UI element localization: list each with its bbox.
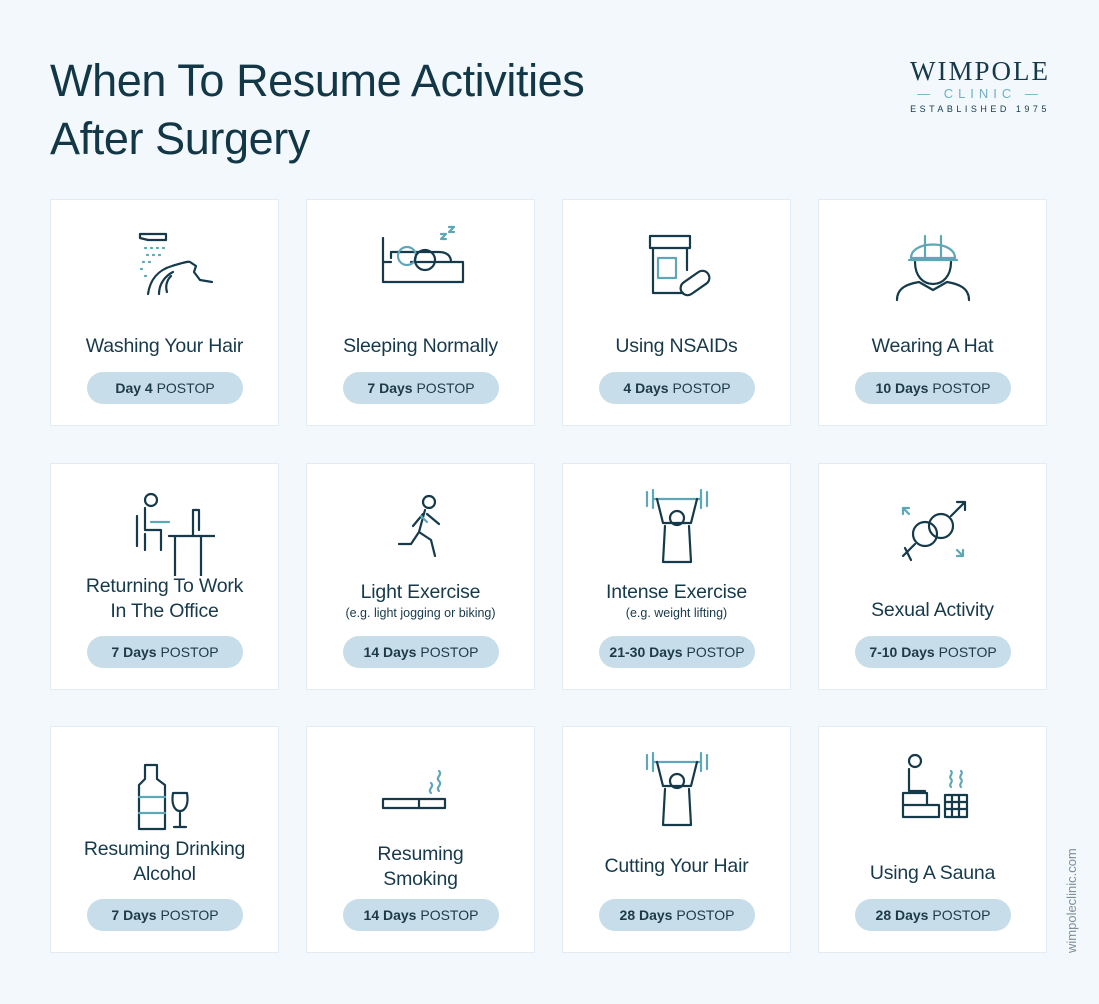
card: alcohol: Alcohol bbox=[133, 863, 196, 885]
card: alcohol bbox=[50, 726, 279, 953]
logo: — CLINIC — bbox=[917, 86, 1043, 101]
icon: gender symbols bbox=[902, 500, 966, 562]
card: light exercise bbox=[306, 463, 535, 690]
icon: sauna bbox=[902, 754, 968, 818]
logo: WIMPOLE bbox=[910, 56, 1050, 86]
card: sleeping: Sleeping Normally bbox=[343, 335, 498, 357]
card: smoking: Smoking bbox=[383, 868, 458, 890]
pill: 10 Days POSTOP bbox=[876, 380, 990, 396]
pill bbox=[599, 899, 755, 931]
card: light exercise: (e.g. light jogging or biking) bbox=[345, 606, 496, 620]
card: work bbox=[50, 463, 279, 690]
card: hat bbox=[818, 199, 1047, 426]
card: cutting hair: Cutting Your Hair bbox=[604, 855, 749, 877]
pill bbox=[343, 372, 499, 404]
card: sauna: Using A Sauna bbox=[870, 862, 995, 884]
pill: 28 Days POSTOP bbox=[620, 907, 734, 923]
pill: 7 Days POSTOP bbox=[367, 380, 475, 396]
pill bbox=[87, 372, 243, 404]
card: intense exercise bbox=[562, 463, 791, 690]
side url: wimpoleclinic.com bbox=[1064, 848, 1079, 953]
pill bbox=[855, 899, 1011, 931]
card: alcohol: Resuming Drinking bbox=[84, 838, 245, 860]
pill: Day 4 POSTOP bbox=[115, 380, 215, 396]
pill: 7 Days POSTOP bbox=[111, 644, 219, 660]
pill bbox=[855, 636, 1011, 668]
card: sleeping bbox=[306, 199, 535, 426]
title: When To Resume Activities bbox=[50, 55, 584, 106]
pill bbox=[855, 372, 1011, 404]
pill: 7 Days POSTOP bbox=[111, 907, 219, 923]
pill: 21-30 Days POSTOP bbox=[609, 644, 745, 660]
card: cutting hair bbox=[562, 726, 791, 953]
icon: weightlifter bbox=[646, 488, 708, 564]
icon: bottle and glass bbox=[138, 764, 189, 830]
pill bbox=[599, 372, 755, 404]
card: light exercise: Light Exercise bbox=[361, 581, 480, 603]
pill: 7-10 Days POSTOP bbox=[869, 644, 997, 660]
pill bbox=[87, 636, 243, 668]
card: hat: Wearing A Hat bbox=[872, 335, 993, 357]
card: sexual activity: Sexual Activity bbox=[871, 599, 994, 621]
pill: 28 Days POSTOP bbox=[876, 907, 990, 923]
title bbox=[50, 55, 584, 164]
icon: runner bbox=[398, 494, 440, 558]
logo: ESTABLISHED 1975 bbox=[910, 104, 1050, 114]
pill: 14 Days POSTOP bbox=[364, 644, 478, 660]
pill bbox=[343, 636, 499, 668]
pill bbox=[343, 899, 499, 931]
icon: pills bbox=[648, 234, 710, 296]
title: After Surgery bbox=[50, 113, 310, 164]
card: intense exercise: (e.g. weight lifting) bbox=[626, 606, 727, 620]
icon: shower hair bbox=[138, 232, 214, 296]
icon: cigarette bbox=[382, 770, 446, 810]
card: NSAIDs: Using NSAIDs bbox=[615, 335, 738, 357]
card: washing hair bbox=[50, 199, 279, 426]
icon: cap person bbox=[896, 234, 970, 302]
pill bbox=[599, 636, 755, 668]
card: smoking: Resuming bbox=[377, 843, 464, 865]
icon: weightlifter bbox=[646, 752, 708, 826]
card: sauna bbox=[818, 726, 1047, 953]
card: work: In The Office bbox=[110, 600, 219, 622]
pill: 14 Days POSTOP bbox=[364, 907, 478, 923]
card: work: Returning To Work bbox=[86, 575, 243, 597]
icon: desk bbox=[136, 492, 215, 576]
card: NSAIDs bbox=[562, 199, 791, 426]
card: smoking bbox=[306, 726, 535, 953]
card: sexual activity bbox=[818, 463, 1047, 690]
pill: 4 Days POSTOP bbox=[623, 380, 731, 396]
icon: bed bbox=[382, 226, 464, 284]
logo bbox=[910, 56, 1050, 114]
card: washing hair: Washing Your Hair bbox=[86, 335, 243, 357]
card: intense exercise: Intense Exercise bbox=[606, 581, 747, 603]
pill bbox=[87, 899, 243, 931]
